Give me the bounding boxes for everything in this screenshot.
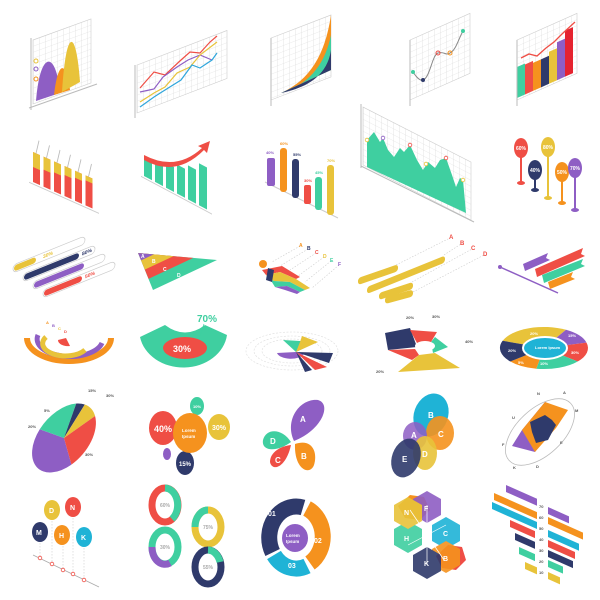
chart: green 30/70 arc: 30% — [173, 344, 191, 354]
chart: venn: B — [428, 411, 434, 420]
chart: petals: C — [275, 456, 281, 465]
chart: compass radar: K — [513, 465, 516, 470]
chart: segmented donut: 20% — [376, 369, 384, 374]
chart: butterfly strips: 70 — [539, 504, 544, 509]
chart: stacked yellow red bars — [29, 136, 99, 213]
chart: hexagon flower: H — [404, 536, 409, 543]
chart: stacked exponential area — [271, 15, 331, 106]
chart: person stripes — [259, 243, 341, 294]
chart: concentric arcs: D — [64, 329, 67, 334]
chart: hexagon flower: K — [424, 561, 429, 568]
chart: labelled bars — [265, 141, 338, 218]
chart: compass radar: A — [563, 390, 566, 395]
chart: person stripes: C — [315, 250, 319, 256]
chart: mountain area — [361, 104, 474, 222]
chart: four donuts: 55% — [203, 565, 214, 571]
chart: bubbles: Ipsum — [182, 434, 195, 439]
chart: pyramid triangle: A — [141, 254, 145, 260]
chart: hexagon flower: F — [424, 506, 429, 513]
chart: cycle diagram: 03 — [288, 563, 296, 570]
chart: petals: B — [301, 452, 307, 461]
chart: 3d pie: 20% — [28, 424, 36, 429]
chart: cycle diagram — [268, 507, 323, 570]
chart: pin markers: 60% — [516, 146, 527, 152]
chart: pyramid triangle: C — [163, 267, 167, 273]
chart: cycle diagram: Ipsum — [286, 539, 299, 544]
chart: yellow horizontal bars: C — [471, 246, 476, 252]
chart: person stripes: E — [330, 258, 334, 264]
chart: bubbles: Lorem — [182, 428, 196, 433]
chart: concentric arcs: B — [52, 323, 55, 328]
chart: compass radar: M — [575, 408, 579, 413]
chart: ring with center label: 15% — [568, 333, 576, 338]
chart: bubbles: 40% — [154, 424, 172, 434]
chart: progress bars: 60% — [86, 258, 96, 268]
chart: rising bars with trend — [517, 13, 577, 106]
chart: ring with center label — [500, 327, 588, 369]
chart: 3d pie: 30% — [106, 393, 114, 398]
chart: compass radar: D — [536, 464, 539, 469]
chart: progress bars: 80% — [82, 248, 92, 258]
chart: yellow horizontal bars: B — [460, 241, 465, 247]
chart: bubbles — [149, 397, 230, 475]
chart: progress bars: 50% — [85, 271, 95, 280]
chart: progress bars — [13, 236, 115, 298]
chart: venn: A — [411, 431, 417, 440]
chart: letter pins on timeline: H — [59, 533, 64, 540]
chart: green bars with red arrow — [141, 132, 212, 214]
chart: ring with center label: 20% — [508, 348, 516, 353]
chart: 3d pie: 15% — [88, 388, 96, 393]
chart: letter pins on timeline — [32, 497, 99, 587]
chart: four donuts: 30% — [160, 545, 171, 551]
chart: hexagon flower: C — [443, 531, 448, 538]
chart: labelled bars: 55% — [293, 152, 301, 157]
chart: cycle diagram: Lorem — [286, 533, 300, 538]
chart: person stripes: D — [323, 254, 327, 260]
chart: butterfly strips: 30 — [539, 548, 544, 553]
chart: venn: E — [402, 455, 408, 464]
chart: multi line — [135, 30, 227, 118]
chart: 3d pie: 5% — [44, 408, 50, 413]
chart: arrow tree — [498, 248, 585, 293]
chart: bubbles: 10% — [193, 404, 201, 409]
chart: ring with center label: Lorem Ipsum — [535, 345, 561, 350]
chart: pin markers: 40% — [530, 168, 541, 174]
chart: cycle diagram: 02 — [314, 538, 322, 545]
chart: pin markers: 50% — [557, 170, 568, 176]
chart: person stripes: F — [338, 262, 341, 268]
chart: pyramid triangle: B — [152, 259, 156, 265]
chart: butterfly strips: 20 — [539, 559, 544, 564]
chart: pin markers — [514, 137, 582, 212]
chart: four donuts: 75% — [203, 525, 214, 531]
chart: cycle diagram: 01 — [268, 511, 276, 518]
chart: compass radar: F — [502, 442, 505, 447]
chart: exploded pie with rings — [246, 332, 338, 372]
chart: area humps — [29, 19, 97, 110]
chart: venn: D — [422, 450, 428, 459]
chart: green 30/70 arc — [140, 314, 227, 368]
chart: petals: D — [270, 437, 276, 446]
chart: pyramid triangle — [138, 253, 217, 290]
chart: venn — [386, 389, 454, 482]
chart: bubbles: 30% — [212, 425, 227, 432]
chart: ring with center label: 30% — [571, 350, 579, 355]
chart: compass radar: E — [560, 440, 563, 445]
chart: concentric arcs: C — [58, 326, 61, 331]
chart: yellow horizontal bars: D — [483, 252, 488, 258]
chart: hexagon flower — [394, 491, 466, 579]
chart: labelled bars: 30% — [304, 178, 312, 183]
chart: bubbles: 15% — [179, 462, 192, 468]
chart: labelled bars: 40% — [266, 150, 274, 155]
chart: green 30/70 arc: 70% — [197, 314, 217, 325]
chart: concentric arcs: A — [46, 320, 49, 325]
chart: ring with center label: 5% — [518, 360, 524, 365]
chart: four donuts — [152, 488, 221, 584]
chart: four donuts: 60% — [160, 503, 171, 509]
chart: petals — [263, 400, 324, 470]
chart: butterfly strips: 60 — [539, 515, 544, 520]
chart: hexagon flower: N — [404, 510, 409, 517]
chart: compass radar: N — [537, 391, 540, 396]
chart: compass radar: U — [512, 415, 515, 420]
chart: yellow horizontal bars — [358, 235, 488, 304]
chart: labelled bars: 60% — [280, 141, 288, 146]
chart: butterfly strips: 10 — [539, 570, 544, 575]
chart: letter pins on timeline: N — [70, 505, 75, 512]
chart: segmented donut: 30% — [432, 314, 440, 319]
chart: letter pins on timeline: M — [36, 530, 42, 537]
chart: pin markers: 70% — [570, 166, 581, 172]
chart: pin markers: 80% — [543, 145, 554, 151]
chart: hexagon flower: B — [443, 556, 448, 563]
chart: person stripes: B — [307, 246, 311, 252]
chart: segmented donut: 20% — [406, 315, 414, 320]
chart: letter pins on timeline: D — [49, 508, 54, 515]
chart: venn: C — [438, 430, 444, 439]
chart: curve line — [410, 13, 470, 106]
chart: pyramid triangle: D — [177, 273, 181, 279]
chart: petals: A — [300, 415, 306, 424]
chart: ring with center label: 20% — [530, 331, 538, 336]
chart: butterfly strips — [492, 485, 583, 584]
chart: 3d pie: 30% — [85, 452, 93, 457]
chart: labelled bars: 45% — [315, 170, 323, 175]
chart: segmented donut: 40% — [465, 339, 473, 344]
chart: concentric arcs — [27, 320, 111, 361]
chart: butterfly strips: 40 — [539, 537, 544, 542]
chart: progress bars: 30% — [43, 250, 53, 260]
chart: ring with center label: 10% — [540, 361, 548, 366]
chart: person stripes: A — [299, 243, 303, 249]
chart: compass radar — [494, 387, 586, 477]
chart: butterfly strips: 50 — [539, 526, 544, 531]
chart: labelled bars: 70% — [327, 158, 335, 163]
chart: segmented donut — [376, 314, 473, 374]
chart: 3d pie — [19, 388, 114, 485]
chart: letter pins on timeline: K — [81, 535, 86, 542]
chart: yellow horizontal bars: A — [449, 235, 454, 241]
